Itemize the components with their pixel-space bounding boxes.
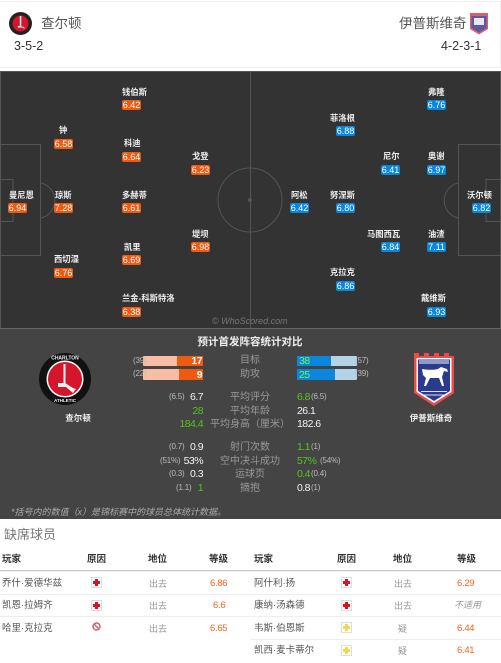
player: 马图西瓦: 马图西瓦 xyxy=(367,229,400,239)
player: 堤坝 xyxy=(191,229,210,252)
stat row: average height xyxy=(179,418,321,430)
player: 钱伯斯 xyxy=(122,87,147,110)
player: 戴维斯 xyxy=(421,293,446,317)
player: 油渣: 7.11 xyxy=(428,242,445,252)
stat row: shots on target: 0.9 xyxy=(190,441,203,453)
stat row: shots on target xyxy=(169,441,320,453)
stat row: dribbles: (0.3) xyxy=(169,469,184,478)
player: 弗隆 xyxy=(427,87,446,110)
row: 凯西·麦卡蒂尔: 凯西·麦卡蒂尔 xyxy=(254,645,314,656)
label: goals: 目标 xyxy=(240,355,260,366)
player: 马图西瓦 xyxy=(367,229,400,252)
away team label: 伊普斯维奇 xyxy=(410,413,452,423)
row: 韦斯·伯恩斯: 6.44 xyxy=(457,623,474,634)
stat row: dribbles: 运球页 xyxy=(235,469,265,480)
stat row: aerial duels: 57% xyxy=(297,455,316,467)
player: 阿松: 6.42 xyxy=(291,203,308,213)
player: 多赫蒂 xyxy=(122,190,147,213)
row: 哈里·克拉克: 6.65 xyxy=(210,623,227,634)
player: 努涅斯: 努涅斯 xyxy=(330,190,355,200)
row: 哈里·克拉克: 出去 xyxy=(149,624,167,634)
player: 奥谢 xyxy=(427,151,446,175)
bar: assists home: (22) xyxy=(133,369,146,378)
panel: match header xyxy=(0,1,501,68)
stat row: shots on target: (0.7) xyxy=(169,442,184,451)
row: 乔什·爱德华兹: 6.86 xyxy=(210,578,227,589)
player: 凯里 xyxy=(122,242,141,265)
row: 凯恩·拉姆齐 xyxy=(0,599,250,611)
icon: Charlton crest: ATHLETIC xyxy=(54,398,77,403)
row: 阿什利·扬: 出去 xyxy=(394,579,412,589)
watermark: © WhoScored.com xyxy=(212,316,288,326)
row: 哈里·克拉克: 哈里·克拉克 xyxy=(2,623,53,634)
home formation: 3-5-2 xyxy=(14,39,43,53)
player: 科迪: 6.64 xyxy=(123,152,140,162)
bar: assists away xyxy=(297,369,368,381)
player: 曼尼恩 xyxy=(8,190,34,213)
player: 钟: 钟 xyxy=(59,125,67,135)
player: 多赫蒂: 多赫蒂 xyxy=(122,190,147,200)
bar: goals home: 17 xyxy=(191,355,202,367)
stat row: aerial duels: 空中决斗成功 xyxy=(220,456,280,467)
icon: Charlton crest xyxy=(39,353,91,405)
stat row: average rating: 平均评分 xyxy=(230,392,270,403)
player: 戈登 xyxy=(191,151,210,175)
icon: Charlton small crest xyxy=(9,12,32,35)
stat row: tackles: 1 xyxy=(198,482,203,494)
row: 韦斯·伯恩斯: 韦斯·伯恩斯 xyxy=(254,623,305,634)
row: 阿什利·扬: 阿什利·扬 xyxy=(254,578,295,589)
player: 琼斯 xyxy=(54,190,73,213)
table header: home: 原因 xyxy=(87,554,106,565)
player: 弗隆: 6.76 xyxy=(428,100,445,110)
label: assists: 助攻 xyxy=(240,369,260,380)
row: 凯西·麦卡蒂尔 xyxy=(250,644,501,656)
player: 西切湿: 6.76 xyxy=(55,268,72,278)
panel: pitch xyxy=(0,71,501,329)
table header: home: 地位 xyxy=(148,554,167,565)
player: 兰金-科斯特洛: 6.38 xyxy=(123,307,140,317)
player: 阿松: 阿松 xyxy=(291,190,308,200)
stat row: dribbles xyxy=(169,468,326,480)
icon: Charlton crest: CHARLTON xyxy=(51,356,79,362)
stat row: tackles: 摘抱 xyxy=(240,483,260,494)
stat row: average height: 平均身高（厘米） xyxy=(210,419,290,430)
bar: goals home xyxy=(133,355,203,367)
player: 琼斯: 琼斯 xyxy=(55,190,72,200)
stat row: average rating: 6.7 xyxy=(190,391,203,403)
bar: assists home: 9 xyxy=(197,369,202,381)
row: 康纳·汤森德: 出去 xyxy=(394,601,412,611)
icon: Ipswich crest xyxy=(414,353,454,406)
player: 科迪 xyxy=(122,138,141,162)
stat row: aerial duels xyxy=(160,455,340,467)
stat row: average age: 平均年龄 xyxy=(230,406,270,417)
bar: assists away: (39) xyxy=(355,369,368,378)
row: 乔什·爱德华兹: 乔什·爱德华兹 xyxy=(2,578,62,589)
panel: missing players xyxy=(0,519,501,663)
player: 沃尔顿 xyxy=(467,190,492,213)
player: 曼尼恩: 6.94 xyxy=(9,203,26,213)
footnote: *括号内的数值（x）是锦标赛中的球员总体统计数据。 xyxy=(11,507,226,517)
row: 韦斯·伯恩斯: 疑 xyxy=(398,624,407,634)
away team name: 伊普斯维奇 xyxy=(399,16,466,31)
stat row: average rating xyxy=(169,391,326,403)
section heading: 缺席球员 xyxy=(4,527,56,542)
row: 凯西·麦卡蒂尔: 疑 xyxy=(398,646,407,656)
table header: away xyxy=(254,553,476,565)
player: 钟: 6.58 xyxy=(55,139,72,149)
player: 尼尔: 尼尔 xyxy=(383,151,400,161)
player: 钱伯斯: 钱伯斯 xyxy=(122,87,147,97)
stat row: dribbles: 0.4 xyxy=(297,468,310,480)
player: 堤坝: 6.98 xyxy=(192,242,209,252)
stats title: 预计首发阵容统计对比 xyxy=(198,336,302,348)
player: 琼斯: 7.28 xyxy=(55,203,72,213)
stat row: shots on target: (1) xyxy=(311,442,320,451)
row: 乔什·爱德华兹 xyxy=(0,577,250,589)
row: 康纳·汤森德: 康纳·汤森德 xyxy=(254,600,305,611)
row: 乔什·爱德华兹: 出去 xyxy=(149,579,167,589)
stat row: tackles: (1) xyxy=(311,483,320,492)
home team label: 查尔顿 xyxy=(65,413,91,423)
row: 康纳·汤森德 xyxy=(250,599,501,611)
player: 弗隆: 弗隆 xyxy=(428,87,445,97)
player: 钟 xyxy=(54,125,73,149)
player: 油渣 xyxy=(427,229,446,252)
player: 戴维斯: 戴维斯 xyxy=(421,293,446,303)
player: 堤坝: 堤坝 xyxy=(192,229,209,239)
table header: away: 地位 xyxy=(393,554,412,565)
stat row: average height: 184.4 xyxy=(179,418,203,430)
player: 油渣: 油渣 xyxy=(428,229,445,239)
row: 凯恩·拉姆齐: 6.6 xyxy=(213,600,225,611)
stat row: average age xyxy=(192,405,316,417)
bar: goals away: (57) xyxy=(355,356,368,365)
player: 西切湿: 西切湿 xyxy=(54,254,79,264)
row: 阿什利·扬 xyxy=(250,577,501,589)
icon: Ipswich small crest xyxy=(470,13,488,34)
bar: goals home: (39) xyxy=(133,356,146,365)
player: 沃尔顿: 沃尔顿 xyxy=(467,190,492,200)
bar: goals away xyxy=(297,355,368,367)
player: 兰金-科斯特洛: 兰金-科斯特洛 xyxy=(122,293,175,303)
table header: home xyxy=(2,553,228,565)
player: 多赫蒂: 6.61 xyxy=(123,203,140,213)
player: 凯里: 6.69 xyxy=(123,255,140,265)
stat row: tackles: (1.1) xyxy=(176,483,191,492)
player: 奥谢: 6.97 xyxy=(428,165,445,175)
stat row: average age: 28 xyxy=(192,405,203,417)
bar: assists home xyxy=(133,369,203,381)
table header: away: 等级 xyxy=(457,554,476,565)
player: 菲洛根: 菲洛根 xyxy=(330,113,355,123)
player: 尼尔: 6.41 xyxy=(382,165,399,175)
stat row: average rating: (6.5) xyxy=(311,392,326,401)
player: 戈登: 戈登 xyxy=(192,151,209,161)
bar: assists away: 25 xyxy=(299,369,310,381)
player: 科迪: 科迪 xyxy=(124,138,141,148)
stat row: tackles xyxy=(176,482,320,494)
player: 戈登: 6.23 xyxy=(192,165,209,175)
player: 菲洛根: 6.88 xyxy=(337,126,354,136)
stat row: aerial duels: (51%) xyxy=(160,456,180,465)
home team name: 查尔顿 xyxy=(41,16,82,31)
row: 康纳·汤森德: 不适用 xyxy=(454,600,481,610)
row: 韦斯·伯恩斯 xyxy=(250,622,501,634)
table header: home: 玩家 xyxy=(2,554,21,565)
player: 克拉克: 6.86 xyxy=(337,281,354,291)
row: 凯西·麦卡蒂尔: 6.41 xyxy=(457,645,474,656)
player: 尼尔 xyxy=(381,151,400,175)
player: 马图西瓦: 6.84 xyxy=(382,242,399,252)
player: 钱伯斯: 6.42 xyxy=(123,100,140,110)
stat row: average rating: (6.5) xyxy=(169,392,184,401)
stat row: shots on target: 1.1 xyxy=(297,441,310,453)
player: 沃尔顿: 6.82 xyxy=(473,203,490,213)
stat row: dribbles: 0.3 xyxy=(190,468,203,480)
row: 凯恩·拉姆齐: 出去 xyxy=(149,601,167,611)
player: 奥谢: 奥谢 xyxy=(428,151,445,161)
panel: predicted lineup stats comparison xyxy=(0,328,501,520)
stat row: average height: 182.6 xyxy=(297,418,321,430)
stat row: average age: 26.1 xyxy=(297,405,315,417)
away formation: 4-2-3-1 xyxy=(441,39,481,53)
bar: goals away: 38 xyxy=(299,355,310,367)
player: 凯里: 凯里 xyxy=(124,242,141,252)
row: 凯恩·拉姆齐: 凯恩·拉姆齐 xyxy=(2,600,53,611)
player: 阿松 xyxy=(290,190,309,213)
row: 阿什利·扬: 6.29 xyxy=(457,578,474,589)
stat row: dribbles: (0.4) xyxy=(311,469,326,478)
player: 兰金-科斯特洛 xyxy=(122,293,175,317)
stat row: tackles: 0.8 xyxy=(297,482,310,494)
player: 努涅斯 xyxy=(330,190,355,213)
player: 克拉克: 克拉克 xyxy=(330,267,355,277)
player: 克拉克 xyxy=(330,267,355,291)
stat row: shots on target: 射门次数 xyxy=(230,442,270,453)
player: 曼尼恩: 曼尼恩 xyxy=(9,190,34,200)
row: 哈里·克拉克 xyxy=(0,622,250,634)
stat row: aerial duels: (54%) xyxy=(320,456,340,465)
pitch markings xyxy=(0,71,501,328)
table header: away: 原因 xyxy=(337,554,356,565)
table header: home: 等级 xyxy=(209,554,228,565)
player: 西切湿 xyxy=(54,254,79,278)
player: 菲洛根 xyxy=(330,113,355,136)
table header: away: 玩家 xyxy=(254,554,273,565)
player: 努涅斯: 6.80 xyxy=(337,203,354,213)
player: 戴维斯: 6.93 xyxy=(428,307,445,317)
stat row: average rating: 6.8 xyxy=(297,391,310,403)
stat row: aerial duels: 53% xyxy=(184,455,203,467)
